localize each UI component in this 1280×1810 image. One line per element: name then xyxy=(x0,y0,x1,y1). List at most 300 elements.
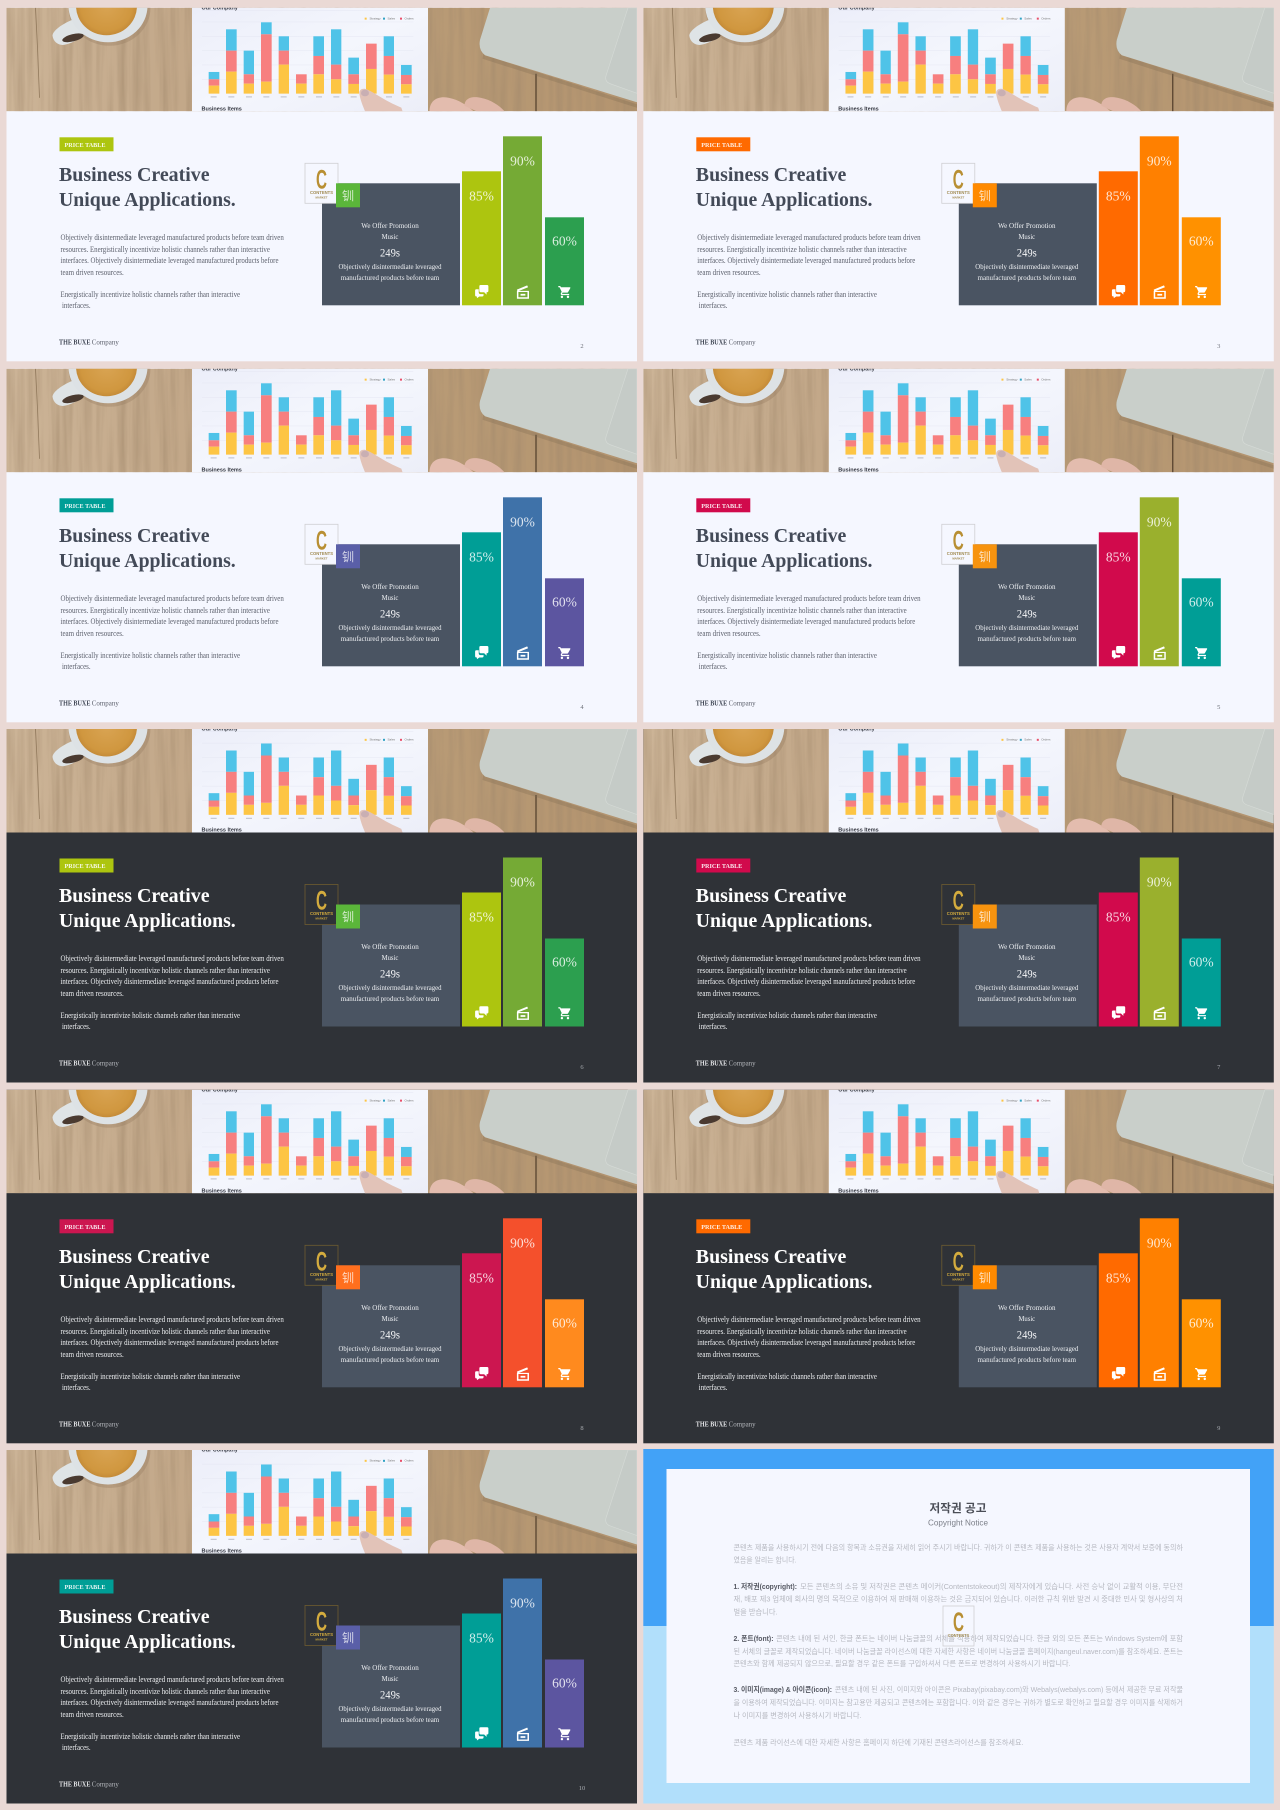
badge xyxy=(60,498,114,512)
watermark logo xyxy=(305,1606,338,1646)
notice section 3: image and icon: 나 이미지를 변경하여 사용하시기 바랍니다. xyxy=(734,1710,862,1720)
panel: offer card: Objectively disintermediate leveraged xyxy=(975,983,1078,992)
bar chart: 85% xyxy=(469,549,494,564)
watermark logo: MARKET xyxy=(316,195,328,199)
watermark logo: C xyxy=(316,525,327,555)
body text xyxy=(60,594,284,671)
body text: interfaces. Objectively disintermediate leveraged manufactured products before xyxy=(697,617,916,626)
heading xyxy=(696,525,872,572)
body text: Energistically incentivize holistic channels rather than interactive xyxy=(60,1011,240,1020)
watermark logo: C xyxy=(953,1246,964,1276)
bar chart: 85% xyxy=(469,188,494,203)
footer: Company xyxy=(92,699,119,707)
body text: team driven resources. xyxy=(697,1350,761,1359)
notice section 1: copyright: 벌을 받습니다. xyxy=(734,1606,778,1616)
panel: offer card: We Offer Promotion xyxy=(998,1303,1056,1312)
panel: offer card: 249s xyxy=(380,608,400,620)
panel: offer card: Music xyxy=(382,953,399,962)
heading: Business Creative xyxy=(696,885,847,907)
panel: offer card: 249s xyxy=(380,968,400,980)
watermark logo: C xyxy=(316,164,327,194)
bar chart: 90% xyxy=(1147,874,1172,890)
photo header: desk with chart xyxy=(644,1090,1274,1194)
watermark logo: MARKET xyxy=(952,916,965,920)
notice intro: 였음을 알리는 합니다. xyxy=(734,1554,796,1564)
footer: THE BUXE xyxy=(696,338,727,346)
photo header: desk with chart xyxy=(643,368,1274,472)
panel: offer card: manufactured products before team xyxy=(978,994,1076,1003)
watermark logo: C xyxy=(953,525,964,555)
heading xyxy=(59,525,236,572)
icon square xyxy=(336,1626,360,1650)
watermark logo xyxy=(305,884,338,924)
footer: Company xyxy=(729,1420,756,1428)
slide 2: light orange price table xyxy=(643,0,1274,361)
photo header: desk with chart: Sales xyxy=(1024,1098,1032,1102)
heading: Unique Applications. xyxy=(696,1271,872,1293)
icon square: 钏 xyxy=(342,187,354,204)
notice section 3: image and icon xyxy=(734,1684,1183,1720)
panel: offer card: Objectively disintermediate leveraged xyxy=(338,623,442,632)
watermark logo xyxy=(942,163,975,203)
footer: Company xyxy=(92,1780,119,1788)
panel: offer card: manufactured products before team xyxy=(978,273,1076,282)
watermark logo: CONTENTS xyxy=(947,190,970,195)
footer: 5 xyxy=(1217,704,1220,711)
notice heading xyxy=(928,1500,989,1528)
body text: interfaces. xyxy=(699,662,727,671)
heading xyxy=(59,1246,236,1293)
panel: offer card: Music xyxy=(382,1314,399,1323)
icon square xyxy=(336,544,360,568)
photo header: desk with chart: Our Company xyxy=(202,726,239,732)
photo header: desk with chart: Sales xyxy=(1024,377,1032,381)
panel: offer card: We Offer Promotion xyxy=(361,942,419,951)
slide 3: light teal price table xyxy=(6,330,637,722)
icon square: 钏 xyxy=(342,1269,354,1286)
body text: interfaces. xyxy=(62,1743,91,1752)
panel: offer card: manufactured products before team xyxy=(341,1715,439,1724)
watermark logo: CONTENTS xyxy=(947,551,970,556)
watermark logo: CONTENTS xyxy=(310,551,333,556)
icon square: 钏 xyxy=(342,548,354,565)
body text: Energistically incentivize holistic channels rather than interactive xyxy=(697,651,877,660)
body text: Objectively disintermediate leveraged manufactured products before team driven xyxy=(697,954,921,963)
body text: interfaces. xyxy=(62,1022,91,1031)
panel: offer card: manufactured products before team xyxy=(341,994,439,1003)
notice closing line: 콘텐츠 제품 라이선스에 대한 자세한 사항은 홈페이지 하단에 기재된 콘텐츠라이선스를 참조하세요. xyxy=(734,1737,1024,1747)
watermark logo: CONTENTS xyxy=(310,1632,333,1637)
panel: offer card: 249s xyxy=(380,1329,400,1341)
photo header: desk with chart: Business Items xyxy=(838,828,879,834)
photo header: desk with chart: Our Company xyxy=(202,1087,239,1093)
body text: interfaces. Objectively disintermediate leveraged manufactured products before xyxy=(697,977,916,986)
body text: Energistically incentivize holistic channels rather than interactive xyxy=(60,651,240,660)
icon square: 钏 xyxy=(979,1269,991,1286)
body text: Objectively disintermediate leveraged manufactured products before team driven xyxy=(697,1315,921,1324)
watermark logo: C xyxy=(953,164,964,194)
bar chart: 60% xyxy=(1189,954,1214,970)
watermark logo xyxy=(942,1245,975,1285)
photo header: desk with chart: Our Company xyxy=(202,1448,239,1454)
panel: offer card: Music xyxy=(1018,953,1036,962)
heading: Unique Applications. xyxy=(696,550,872,572)
body text: team driven resources. xyxy=(697,629,761,638)
heading xyxy=(59,164,236,211)
body text: interfaces. xyxy=(62,1383,91,1392)
photo header: desk with chart: Business Items xyxy=(202,1548,242,1554)
heading xyxy=(696,1246,872,1293)
panel: offer card xyxy=(959,544,1097,666)
bar chart: 60% xyxy=(1189,594,1214,609)
panel: offer card xyxy=(322,904,460,1026)
bar chart: 60% xyxy=(552,594,577,609)
badge: PRICE TABLE xyxy=(64,1584,106,1591)
panel: offer card xyxy=(322,544,460,666)
footer xyxy=(59,699,584,711)
body text: interfaces. Objectively disintermediate leveraged manufactured products before xyxy=(697,1338,916,1347)
bar chart: 90% xyxy=(510,1235,535,1250)
footer: 10 xyxy=(579,1785,585,1792)
panel: offer card: 249s xyxy=(380,247,400,259)
heading: Business Creative xyxy=(59,525,210,547)
body text: Energistically incentivize holistic channels rather than interactive xyxy=(697,290,877,299)
footer: Company xyxy=(729,338,756,346)
body text: Objectively disintermediate leveraged manufactured products before team driven xyxy=(697,233,921,242)
bar chart: 85% xyxy=(469,1630,494,1646)
heading: Business Creative xyxy=(59,1606,210,1628)
slide 6: dark crimson price table xyxy=(643,690,1274,1082)
footer xyxy=(696,1420,1220,1432)
bar chart: 85% xyxy=(1106,1270,1131,1285)
panel: offer card: manufactured products before team xyxy=(978,634,1076,643)
photo header: desk with chart: Orders xyxy=(404,738,414,742)
bar chart: 60% xyxy=(1189,1315,1214,1330)
body text: resources. Energistically incentivize holistic channels rather than interactive xyxy=(60,245,270,254)
footer: 9 xyxy=(1217,1425,1220,1432)
photo header: desk with chart: Orders xyxy=(1041,16,1051,20)
photo header: desk with chart: Orders xyxy=(404,1458,414,1462)
body text: team driven resources. xyxy=(60,629,124,638)
photo header: desk with chart: Our Company xyxy=(838,366,876,372)
panel: offer card: 249s xyxy=(1017,608,1037,620)
watermark logo: CONTENTS xyxy=(947,1272,970,1277)
watermark logo: MARKET xyxy=(316,1638,328,1642)
watermark logo: C xyxy=(953,886,964,916)
photo header: desk with chart: Strategy xyxy=(370,1098,381,1102)
body text: interfaces. Objectively disintermediate leveraged manufactured products before xyxy=(60,256,279,265)
body text xyxy=(60,1675,284,1752)
body text: resources. Energistically incentivize holistic channels rather than interactive xyxy=(697,606,907,615)
bar chart: 90% xyxy=(1147,1235,1172,1250)
footer xyxy=(59,338,584,350)
panel: offer card: 249s xyxy=(1017,247,1037,259)
body text: team driven resources. xyxy=(60,1710,124,1719)
badge: PRICE TABLE xyxy=(64,142,106,149)
badge: PRICE TABLE xyxy=(701,503,742,510)
bar chart xyxy=(462,497,584,666)
watermark logo: CONTENTS xyxy=(310,911,333,916)
bar chart xyxy=(1099,858,1221,1026)
heading: Unique Applications. xyxy=(59,1631,236,1653)
panel: offer card: We Offer Promotion xyxy=(998,942,1056,951)
panel: offer card: We Offer Promotion xyxy=(998,221,1056,230)
icon square xyxy=(336,1265,360,1289)
notice intro: 콘텐츠 제품을 사용하시기 전에 다음의 항목과 소유권을 자세히 읽어 주시기 바랍니다. 귀하가 이 콘텐츠 제품을 사용하는 것은 사용자 계약서 보증에 동의하 xyxy=(734,1542,1183,1552)
bar chart xyxy=(1099,1218,1221,1387)
photo header: desk with chart: Business Items xyxy=(202,828,242,834)
notice section 2: font: 콘텐츠 내에 된 서인, 한글 폰트는 네이버 나눔글꼴의 서체를 적용하여 제작되었습니다. 한글 외의 모든 폰트는 Windows System에 포함 xyxy=(776,1633,1183,1643)
body text: interfaces. Objectively disintermediate leveraged manufactured products before xyxy=(60,617,279,626)
heading: Unique Applications. xyxy=(59,910,236,932)
watermark logo: CONTENTS xyxy=(310,190,333,195)
body text xyxy=(697,954,921,1031)
footer xyxy=(59,1060,584,1071)
bar chart: 90% xyxy=(1147,153,1172,168)
slide 7: dark red price table xyxy=(6,1051,637,1443)
watermark logo: C xyxy=(316,1246,327,1276)
watermark logo xyxy=(942,524,975,564)
panel: offer card: Objectively disintermediate leveraged xyxy=(975,1344,1078,1353)
photo header: desk with chart: Our Company xyxy=(838,726,876,732)
watermark logo xyxy=(943,1606,974,1646)
icon square: 钏 xyxy=(979,548,991,565)
body text: team driven resources. xyxy=(697,989,761,998)
body text: interfaces. xyxy=(699,1383,727,1392)
bar chart xyxy=(1099,136,1221,305)
photo header: desk with chart: Orders xyxy=(1041,377,1051,381)
bar chart: 85% xyxy=(1106,910,1131,924)
body text xyxy=(60,1315,284,1392)
photo header: desk with chart: Strategy xyxy=(1006,16,1018,20)
heading: Unique Applications. xyxy=(59,189,236,211)
body text: Objectively disintermediate leveraged manufactured products before team driven xyxy=(697,594,921,603)
notice section 3: image and icon: 콘텐츠 내에 된 사진, 이미지와 아이콘은 Pixabay(pixabay.com)와 Webalys(webalys.com) 등에서 제공한 무료 저작물 xyxy=(835,1684,1183,1694)
badge xyxy=(60,1219,114,1233)
body text: Energistically incentivize holistic channels rather than interactive xyxy=(60,1372,240,1381)
panel: offer card: 249s xyxy=(1017,1329,1037,1341)
badge xyxy=(60,1580,114,1594)
body text: Objectively disintermediate leveraged manufactured products before team driven xyxy=(60,954,284,963)
footer xyxy=(59,1780,585,1792)
heading: Unique Applications. xyxy=(59,1271,236,1293)
body text: Energistically incentivize holistic channels rather than interactive xyxy=(60,1732,240,1741)
footer: THE BUXE xyxy=(59,1060,91,1068)
photo header: desk with chart: Sales xyxy=(388,1098,396,1102)
notice section 2: font: 콘텐츠와 함께 제공되지 않으므로, 필요할 경우 같은 폰트를 구입하셔서 다른 폰트로 변경하여 사용하시기 바랍니다. xyxy=(734,1658,1070,1668)
badge xyxy=(696,498,750,512)
photo header: desk with chart: Business Items xyxy=(838,106,879,112)
slide 5: dark green price table xyxy=(6,690,637,1082)
body text: resources. Energistically incentivize holistic channels rather than interactive xyxy=(697,245,907,254)
body text: Objectively disintermediate leveraged manufactured products before team driven xyxy=(60,1315,284,1324)
watermark logo: CONTENTS xyxy=(310,1272,333,1277)
body text: interfaces. Objectively disintermediate leveraged manufactured products before xyxy=(60,977,279,986)
watermark logo: MARKET xyxy=(952,195,965,199)
photo header: desk with chart xyxy=(643,0,1274,114)
photo header: desk with chart: Orders xyxy=(404,1098,414,1102)
notice section 2: font: 된 서체의 글꼴로 제작되었습니다. 네이버 나눔글꼴 라이선스에 대한 자세한 사항은 네이버 나눔글꼴 홈페이지(hangeul.naver.com)를 참조하세요. 폰트는 xyxy=(734,1646,1183,1656)
photo header: desk with chart: Our Company xyxy=(838,1087,876,1093)
body text: resources. Energistically incentivize holistic channels rather than interactive xyxy=(697,1327,907,1336)
body text: team driven resources. xyxy=(60,268,124,277)
body text: interfaces. xyxy=(699,1022,727,1031)
body text: team driven resources. xyxy=(60,1350,124,1359)
badge xyxy=(696,137,750,151)
photo header: desk with chart: Strategy xyxy=(1006,377,1018,381)
panel: offer card: manufactured products before team xyxy=(341,634,439,643)
photo header: desk with chart: Strategy xyxy=(370,738,381,742)
body text: interfaces. xyxy=(62,662,91,671)
footer: THE BUXE xyxy=(696,699,727,707)
notice section 1: copyright: 1. 저작권(copyright): xyxy=(734,1581,797,1591)
photo header: desk with chart: Sales xyxy=(388,738,396,742)
panel: offer card: We Offer Promotion xyxy=(361,582,419,591)
photo header: desk with chart: Business Items xyxy=(202,1188,242,1194)
heading: Business Creative xyxy=(59,1246,210,1268)
photo header: desk with chart: Strategy xyxy=(1006,1098,1018,1102)
body text xyxy=(697,594,921,671)
panel: offer card: We Offer Promotion xyxy=(361,1303,419,1312)
heading: Unique Applications. xyxy=(696,189,872,211)
footer: 4 xyxy=(580,704,584,711)
footer: Company xyxy=(92,1060,119,1068)
watermark logo: C xyxy=(953,1607,964,1637)
watermark logo xyxy=(305,524,338,564)
footer: 2 xyxy=(580,343,584,350)
bar chart: 90% xyxy=(510,514,535,529)
photo header: desk with chart: Business Items xyxy=(838,467,879,473)
notice section 2: font xyxy=(734,1633,1183,1668)
body text xyxy=(60,233,284,310)
icon square: 钏 xyxy=(979,187,991,204)
heading xyxy=(59,1606,236,1653)
body text: Energistically incentivize holistic channels rather than interactive xyxy=(60,290,240,299)
bar chart: 90% xyxy=(1147,514,1172,529)
bar chart: 60% xyxy=(552,1676,577,1690)
bar chart: 90% xyxy=(510,1596,535,1610)
footer: Company xyxy=(729,699,756,707)
photo header: desk with chart: Sales xyxy=(388,16,396,20)
watermark logo: C xyxy=(316,886,327,916)
watermark logo: C xyxy=(316,1606,327,1636)
body text: resources. Energistically incentivize holistic channels rather than interactive xyxy=(697,966,907,975)
slide 8: dark orange price table xyxy=(643,1051,1274,1443)
footer: 8 xyxy=(580,1425,584,1432)
photo header: desk with chart: Sales xyxy=(1024,738,1032,742)
heading xyxy=(696,164,872,211)
footer: THE BUXE xyxy=(696,1420,727,1428)
footer: Company xyxy=(92,1420,119,1428)
icon square: 钏 xyxy=(979,908,991,925)
photo header: desk with chart: Our Company xyxy=(838,5,876,11)
photo header: desk with chart: Strategy xyxy=(370,377,381,381)
footer: THE BUXE xyxy=(59,1420,91,1428)
badge xyxy=(696,1219,750,1233)
heading: Business Creative xyxy=(696,1246,847,1268)
photo header: desk with chart: Strategy xyxy=(1006,738,1018,742)
notice heading: Copyright Notice xyxy=(928,1518,989,1528)
slide 10: copyright notice xyxy=(643,1449,1274,1804)
panel: offer card xyxy=(322,183,460,305)
body text: interfaces. xyxy=(699,301,727,310)
photo header: desk with chart: Orders xyxy=(1041,738,1051,742)
bar chart xyxy=(462,1578,584,1748)
watermark logo: MARKET xyxy=(316,1277,328,1281)
bar chart: 60% xyxy=(552,1315,577,1330)
body text xyxy=(697,233,921,310)
bar chart: 60% xyxy=(1189,233,1214,248)
footer xyxy=(696,1060,1221,1071)
badge: PRICE TABLE xyxy=(701,863,742,870)
bar chart xyxy=(1099,497,1221,666)
watermark logo xyxy=(305,163,338,203)
footer: 6 xyxy=(580,1064,584,1071)
body text: Objectively disintermediate leveraged manufactured products before team driven xyxy=(60,1675,284,1684)
panel: offer card: Music xyxy=(1018,232,1036,241)
footer: Company xyxy=(92,338,119,346)
slide 1: light green price table xyxy=(6,0,637,361)
body text: interfaces. xyxy=(62,301,91,310)
panel: offer card: We Offer Promotion xyxy=(361,1663,419,1672)
panel: offer card xyxy=(322,1265,460,1387)
panel: offer card xyxy=(322,1626,460,1748)
bar chart: 85% xyxy=(469,1270,494,1285)
notice section 2: font: 2. 폰트(font): xyxy=(734,1634,774,1643)
bar chart: 90% xyxy=(510,874,535,890)
panel: offer card: Objectively disintermediate leveraged xyxy=(338,1344,442,1353)
photo header: desk with chart xyxy=(6,729,637,832)
photo header: desk with chart: Orders xyxy=(404,377,414,381)
photo header: desk with chart: Our Company xyxy=(202,5,239,11)
photo header: desk with chart: Business Items xyxy=(838,1188,879,1194)
photo header: desk with chart: Business Items xyxy=(202,106,242,112)
badge xyxy=(60,858,114,872)
body text: resources. Energistically incentivize holistic channels rather than interactive xyxy=(60,606,270,615)
bar chart: 90% xyxy=(510,153,535,168)
panel: offer card: Music xyxy=(382,1674,399,1683)
notice section 3: image and icon: 을 이용하여 제작되었습니다. 이미지는 참고용만 제공되고 콘텐츠에는 포함합니다. 이와 같은 경우는 귀하가 별도로 확인하고 필요할 경우 이미지를 삭제하거 xyxy=(734,1697,1183,1707)
footer: THE BUXE xyxy=(59,699,91,707)
watermark logo: MARKET xyxy=(316,916,328,920)
body text xyxy=(697,1315,921,1392)
body text: Objectively disintermediate leveraged manufactured products before team driven xyxy=(60,233,284,242)
panel: offer card: Music xyxy=(382,593,399,602)
watermark logo: CONTENTS xyxy=(947,911,970,916)
panel: offer card xyxy=(959,904,1097,1026)
photo header: desk with chart xyxy=(6,1450,637,1554)
panel: offer card: Objectively disintermediate leveraged xyxy=(975,623,1078,632)
photo header: desk with chart: Sales xyxy=(388,1458,396,1462)
badge: PRICE TABLE xyxy=(64,503,106,510)
photo header: desk with chart xyxy=(644,729,1274,832)
panel: offer card: Objectively disintermediate leveraged xyxy=(338,983,442,992)
footer: 3 xyxy=(1217,343,1220,350)
icon square: 钏 xyxy=(342,1629,354,1646)
panel: offer card: Music xyxy=(1018,593,1036,602)
body text: Objectively disintermediate leveraged manufactured products before team driven xyxy=(60,594,284,603)
panel: offer card: 249s xyxy=(1017,968,1037,980)
heading: Business Creative xyxy=(59,885,210,907)
photo header: desk with chart xyxy=(6,0,637,114)
badge: PRICE TABLE xyxy=(701,142,742,149)
footer xyxy=(696,699,1220,711)
photo header: desk with chart: Sales xyxy=(1024,16,1032,20)
watermark logo: MARKET xyxy=(316,556,328,560)
icon square xyxy=(973,904,997,928)
footer: THE BUXE xyxy=(59,1780,91,1788)
panel: offer card: manufactured products before team xyxy=(341,273,439,282)
